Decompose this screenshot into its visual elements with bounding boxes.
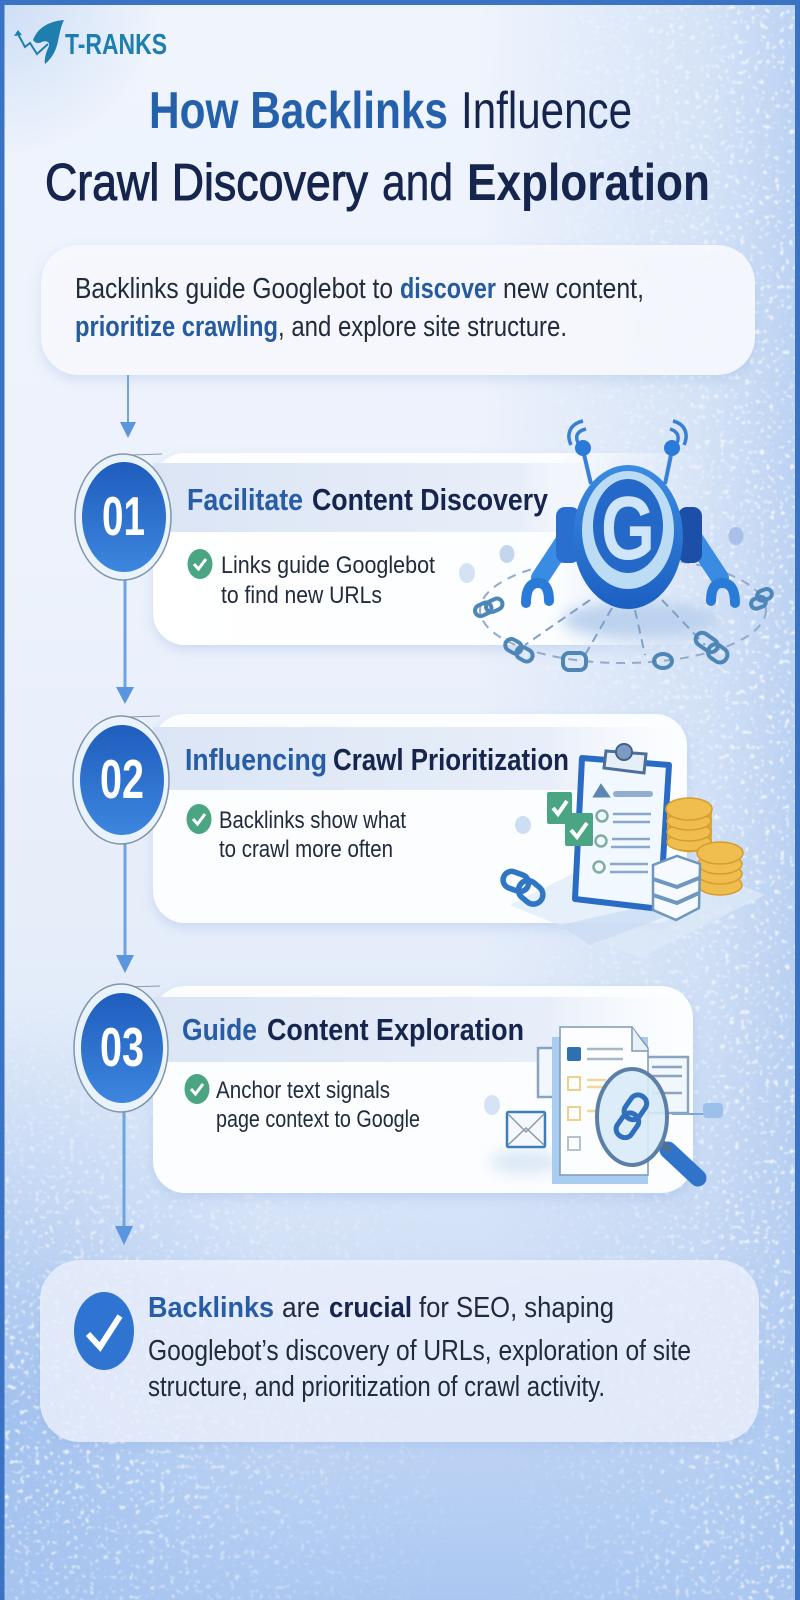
arrow: intro to step 1 [120,375,136,438]
main page [552,1027,648,1184]
step 1 text [221,552,435,609]
logo wordmark: T-RANKS [65,29,167,61]
envelope [507,1112,545,1147]
badge 02: 02 [100,748,144,810]
arrow: step 3 to conclusion [115,1111,133,1245]
step 1 text: to find new URLs [221,582,382,609]
robot ear cups [556,507,702,563]
magnifier [597,1069,698,1178]
robot arms and claws [526,540,735,603]
card 1 [153,453,713,645]
badge 01: 01 [102,485,145,547]
step 1 text: Links guide Googlebot [221,552,435,579]
panel: step 2 [73,714,765,973]
chain link [501,869,547,908]
panel: step 1 [75,421,773,704]
panel: conclusion [40,1260,759,1442]
logo [14,20,167,64]
arrow: step 1 to step 2 [116,580,134,704]
icon: blue check badge [74,1292,134,1370]
title [45,82,710,212]
dot [515,816,531,834]
heading 1 [187,482,549,517]
robot body [573,465,683,609]
card 3 [153,986,693,1193]
base plate [510,860,765,958]
intro text: Backlinks guide Googlebot to [75,273,393,305]
heading 2 [185,742,569,777]
arrow: step 2 to step 3 [116,844,134,973]
badge 02 [73,716,169,844]
heading 3 [182,1012,524,1047]
title: and [382,154,453,212]
tag [672,1103,723,1118]
heading 2: Crawl Prioritization [333,742,569,777]
heading 3: Guide [182,1012,257,1047]
icon: green check 3 [184,1074,210,1104]
intro text: , and explore site structure. [278,311,567,343]
intro text: prioritize crawling [75,311,278,343]
step 3 text: Anchor text signals [216,1077,390,1104]
step 3 text: page context to Google [216,1106,420,1133]
intro text [75,273,644,343]
conclusion text: Backlinks [148,1292,274,1324]
title: How Backlinks [149,82,448,140]
step 3 text [216,1077,420,1133]
icon: Googlebot robot with link network [459,421,773,670]
icon: green check 2 [186,804,212,834]
card 2 [153,714,687,923]
heading 1: Content Discovery [312,482,549,517]
link network [473,557,773,670]
panel: step 3 [74,984,723,1245]
conclusion text: Googlebot’s discovery of URLs, exploration of site [148,1335,691,1367]
title: Crawl Discovery [45,154,368,212]
back documents [538,1048,688,1113]
heading 3: Content Exploration [267,1012,524,1047]
title: Exploration [467,154,710,212]
intro text: new content, [503,273,644,305]
step 2 text: to crawl more often [219,836,393,863]
badge 03: 03 [100,1016,144,1078]
intro text: discover [400,273,496,305]
panel: intro [41,245,755,375]
conclusion text: crucial [329,1292,412,1324]
coin stacks [666,798,743,895]
icon: documents, envelope and magnifier [484,1027,723,1184]
title: Influence [461,82,632,140]
badge 01 [75,454,171,580]
database stack [653,856,700,920]
conclusion text: structure, and prioritization of crawl activity. [148,1371,605,1403]
clipboard [575,744,669,909]
robot body: G [601,479,655,579]
icon: clipboard, coins and links [501,744,765,958]
step 2 text: Backlinks show what [219,807,406,834]
floating dots [459,527,744,583]
icon: green check 1 [188,549,212,579]
conclusion text [148,1292,691,1403]
badge 03 [74,984,168,1112]
heading 2: Influencing [185,742,327,777]
icon: shark and trend arrow [14,20,64,64]
robot antennae [569,421,686,484]
conclusion text: for SEO, shaping [419,1292,614,1324]
dot [484,1095,500,1115]
heading 1: Facilitate [187,482,303,517]
green check boxes [547,792,593,846]
step 2 text [219,807,406,863]
conclusion text: are [282,1292,320,1324]
